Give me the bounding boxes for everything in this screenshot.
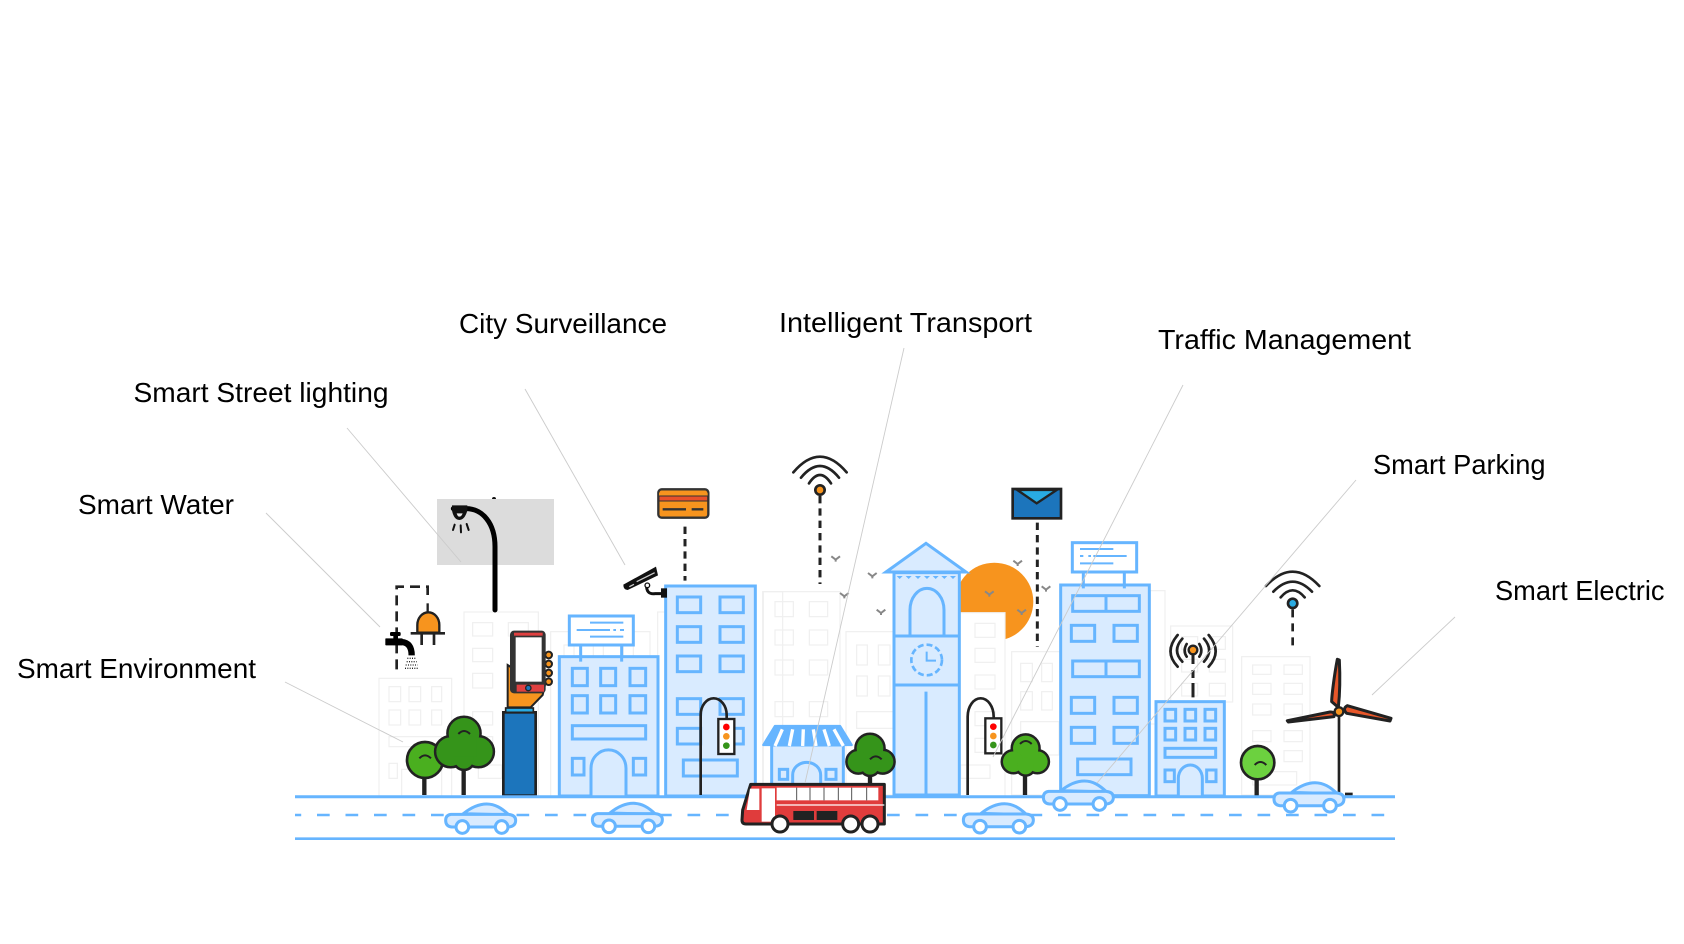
tree: bright green <box>1003 736 1048 795</box>
building: right tall with billboard <box>1061 543 1149 796</box>
red bus <box>742 784 884 832</box>
icon: hand holding smartphone <box>503 631 552 796</box>
background faint buildings <box>379 591 1310 797</box>
label: Smart Parking: Smart Parking <box>1373 449 1546 480</box>
icon: water tap <box>385 632 419 668</box>
building: tall blue tower with traffic light <box>666 586 755 796</box>
icon: street lamp <box>452 505 495 610</box>
label: Smart Street lighting: Smart Street lighting <box>134 377 388 408</box>
icon: wifi tower right <box>1266 572 1319 650</box>
icon: wifi tower centre <box>793 457 847 584</box>
icon: credit card on dashed link <box>658 489 708 581</box>
label: Smart Environment: Smart Environment <box>17 653 256 684</box>
icon: wind turbine <box>1287 659 1391 794</box>
traffic light right <box>968 698 1001 795</box>
label: Smart Electric: Smart Electric <box>1495 575 1665 606</box>
birds <box>831 556 1050 615</box>
tree: beside shop <box>848 735 893 784</box>
market shop <box>763 726 852 785</box>
road <box>295 797 1395 839</box>
building: left blue office with billboard <box>559 616 658 796</box>
label: City Surveillance: City Surveillance <box>459 308 667 339</box>
icon: signal antenna <box>1170 635 1216 697</box>
icon: plug with dashed link <box>397 587 445 669</box>
car 1 <box>446 804 516 833</box>
white building in front of sun <box>960 613 1005 796</box>
icon: envelope on dashed link <box>1013 489 1061 647</box>
sun <box>955 563 1033 641</box>
grey highlight box behind street lamp <box>437 499 554 565</box>
label: Traffic Management: Traffic Management <box>1158 324 1411 355</box>
building: small blue <box>1156 702 1224 796</box>
clock tower <box>886 543 966 795</box>
car 4 <box>1043 781 1113 810</box>
leader lines <box>266 348 1455 783</box>
car 5 <box>1274 783 1344 812</box>
icon: surveillance camera <box>623 567 667 598</box>
tree: round right <box>1241 746 1274 796</box>
car 2 <box>592 803 662 833</box>
label: Smart Water: Smart Water <box>78 489 234 520</box>
small lamp tip above grey box <box>492 497 496 501</box>
label: Intelligent Transport: Intelligent Transport <box>779 307 1032 338</box>
car 3 <box>963 804 1033 833</box>
trees: left pair <box>407 718 493 795</box>
